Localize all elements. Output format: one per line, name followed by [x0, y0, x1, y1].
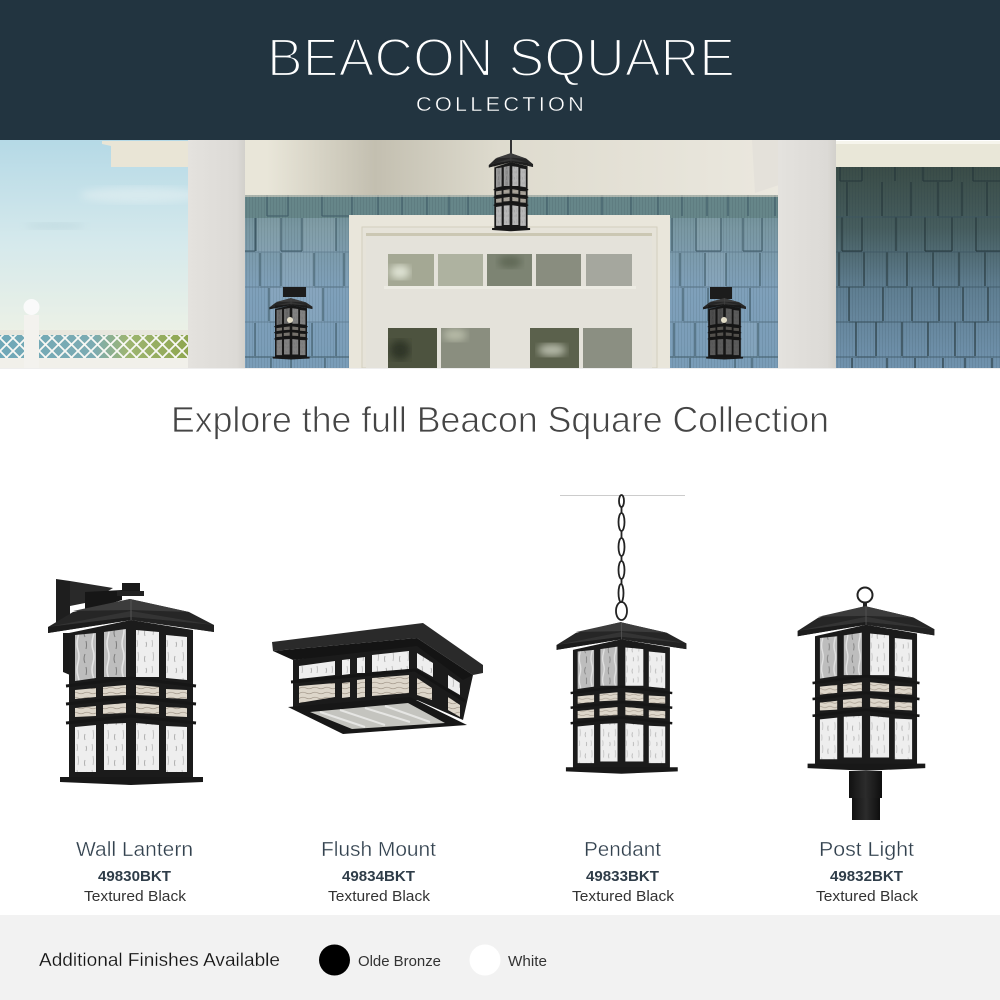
label: pendant: Pendant — [584, 839, 661, 861]
door windows — [388, 254, 632, 368]
subtitle: COLLECTION — [416, 94, 587, 116]
sky — [0, 140, 200, 368]
left eave — [102, 141, 188, 167]
finish: Textured Black — [84, 889, 187, 905]
door — [349, 215, 670, 368]
swatch: olde bronze — [319, 944, 350, 976]
panel: products — [48, 495, 934, 905]
lantern image: pendant — [557, 495, 686, 774]
model number: 49832BKT — [830, 869, 903, 885]
lantern image: flush mount — [272, 623, 483, 734]
right wall — [836, 167, 1000, 368]
product: wall lantern — [48, 579, 214, 905]
product: pendant — [557, 495, 686, 905]
title: BEACON SQUARE — [267, 28, 735, 88]
finish: Textured Black — [816, 889, 919, 905]
photo: porch scene — [0, 140, 1000, 369]
product: post light — [798, 588, 934, 905]
header band — [0, 0, 1000, 140]
footer: additional finishes — [0, 915, 1000, 1000]
model number: 49833BKT — [586, 869, 659, 885]
swatch: white — [470, 944, 500, 976]
right eave — [836, 141, 1000, 167]
fence — [0, 299, 188, 368]
label: flush mount: Flush Mount — [321, 839, 436, 861]
right pillar return — [752, 140, 785, 193]
label: post light: Post Light — [819, 839, 914, 861]
finish: Textured Black — [328, 889, 431, 905]
right pillar — [778, 140, 836, 368]
swatch label: white: White — [508, 954, 547, 970]
left pillar — [188, 140, 245, 368]
label: wall lantern: Wall Lantern — [76, 839, 193, 861]
lantern image: post — [798, 588, 934, 820]
scene lantern: left wall — [270, 287, 312, 359]
scene lantern: right wall — [703, 287, 746, 359]
heading: explore: Explore the full Beacon Square Collection — [171, 399, 829, 440]
model number: 49830BKT — [98, 869, 171, 885]
footer label: Additional Finishes Available — [39, 949, 280, 970]
scene lantern: hanging — [489, 140, 533, 231]
swatch label: olde bronze: Olde Bronze — [358, 954, 441, 970]
model number: 49834BKT — [342, 869, 415, 885]
finish: Textured Black — [572, 889, 675, 905]
ceiling — [240, 140, 780, 195]
shingle wall — [245, 195, 778, 368]
lantern image: wall — [48, 579, 214, 785]
product: flush mount — [272, 623, 483, 905]
